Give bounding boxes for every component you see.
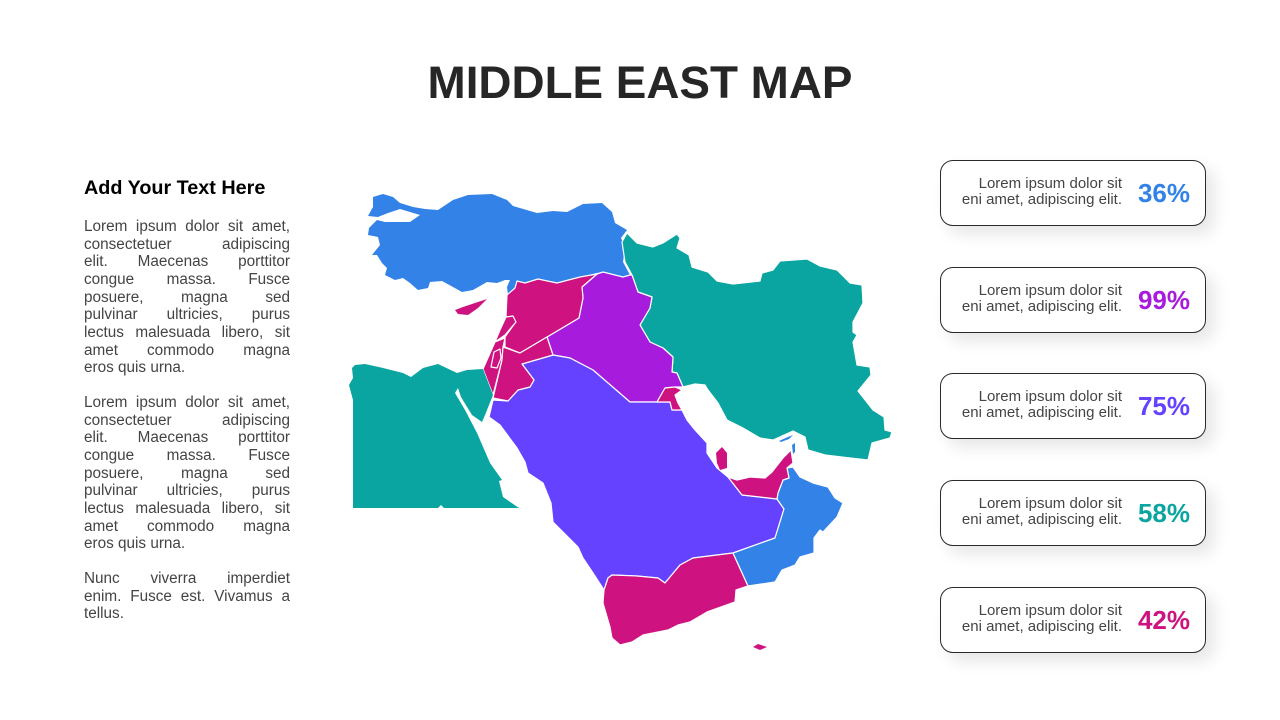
stat card 36%: eni amet, adipiscing elit. [962,191,1122,208]
stat card 58%: eni amet, adipiscing elit. [962,511,1122,528]
stat card 75%: eni amet, adipiscing elit. [962,404,1122,421]
stat card 36%: 36% [1138,178,1190,208]
text block 2: pulvinar ultricies, purus [84,482,290,499]
country: Iran [622,233,892,460]
text block 2: Lorem ipsum dolor sit amet, [84,394,290,411]
text block 3: tellus. [84,605,124,622]
text block 1: pulvinar ultricies, purus [84,306,290,323]
stat card 99% [940,267,1206,333]
text block 1: consectetuer adipiscing [84,236,290,253]
stat card 99%: 99% [1138,285,1190,315]
country: Jordan [493,337,553,401]
country: UAE [728,450,793,499]
country: Yemen [603,553,748,645]
country: Saudi Arabia [489,355,784,590]
country: Israel and Palestine [483,338,505,395]
country: Iraq [547,272,683,402]
stat card 99%: eni amet, adipiscing elit. [962,298,1122,315]
title: MIDDLE EAST MAP [428,57,852,108]
island: Socotra [753,644,767,650]
stat card 75%: Lorem ipsum dolor sit [979,388,1122,405]
stat card 58%: 58% [1138,498,1190,528]
text block 2: amet commodo magna [84,518,290,535]
text block 1: eros quis urna. [84,359,185,376]
text block 2: congue massa. Fusce [84,447,290,464]
country: Lebanon [495,316,516,342]
country: Syria [505,274,597,353]
stat card 58% [940,480,1206,546]
country: Egypt [349,364,519,508]
country: Cyprus [455,299,487,315]
stat card 75% [940,373,1206,439]
text block 1: amet commodo magna [84,342,290,359]
text block 1: elit. Maecenas porttitor [84,253,290,270]
country: Oman [733,467,843,586]
island: Qeshm [779,435,793,442]
text block 3: enim. Fusce est. Vivamus a [84,588,290,605]
text block 2: consectetuer adipiscing [84,412,290,429]
text block 2: lectus malesuada libero, sit [84,500,290,517]
stat card 42%: 42% [1138,605,1190,635]
stat card 36%: Lorem ipsum dolor sit [979,175,1122,192]
text block 2: eros quis urna. [84,535,185,552]
text heading: Add Your Text Here [84,177,265,199]
text block 1: Lorem ipsum dolor sit amet, [84,218,290,235]
country: Palestine [491,349,501,368]
text block 3: Nunc viverra imperdiet [84,570,290,587]
text block 2: posuere, magna sed [84,465,290,482]
stat card 42% [940,587,1206,653]
stat card 42%: Lorem ipsum dolor sit [979,602,1122,619]
stat card 58%: Lorem ipsum dolor sit [979,495,1122,512]
stat card 99%: Lorem ipsum dolor sit [979,282,1122,299]
stat card 42%: eni amet, adipiscing elit. [962,618,1122,635]
text block 1: lectus malesuada libero, sit [84,324,290,341]
country: Kuwait [657,387,682,410]
exclave: Musandam [792,443,795,454]
text block 1: congue massa. Fusce [84,271,290,288]
text block 1 [84,218,290,376]
text block 1: posuere, magna sed [84,289,290,306]
stat card 36% [940,160,1206,226]
text block 2 [84,394,290,552]
country: Qatar [716,447,727,470]
country: Turkey [368,194,630,295]
text block 3 [84,570,290,622]
stat card 75%: 75% [1138,391,1190,421]
text block 2: elit. Maecenas porttitor [84,429,290,446]
